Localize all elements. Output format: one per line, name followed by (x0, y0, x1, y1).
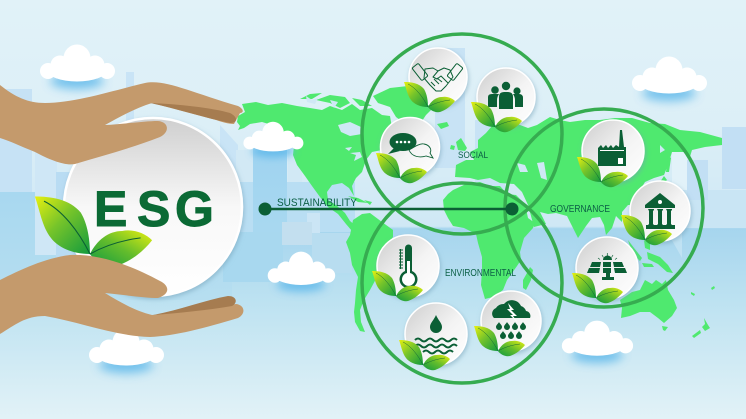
cloud: over alaska (243, 122, 303, 157)
cloud: bottom right (562, 321, 633, 363)
pacific islets (691, 286, 715, 296)
japan and sakhalin (652, 155, 671, 188)
label: sustainability: SUSTAINABILITY (277, 197, 358, 209)
new zealand (692, 318, 710, 338)
cloud: centre (268, 252, 335, 292)
connector line (258, 202, 518, 216)
greenland (373, 86, 433, 131)
cloud: top left (40, 44, 115, 89)
ESG title: ESG (94, 181, 214, 237)
large ESG disc (64, 118, 242, 296)
map: australia (620, 280, 677, 323)
circle: governance (505, 109, 703, 307)
map: africa (443, 182, 535, 299)
cloud: bottom left (89, 328, 164, 373)
icon: handshake (404, 48, 467, 112)
south america (346, 213, 393, 332)
icon: people (471, 68, 535, 132)
circle: environmental (362, 183, 562, 383)
icon: water drop and waves (399, 303, 467, 370)
map: madagascar (523, 267, 533, 290)
arctic islands (300, 93, 372, 108)
icon: solar panel (572, 237, 638, 303)
icon: factory (577, 120, 644, 187)
world map (237, 86, 722, 338)
cuba and caribbean (348, 196, 372, 205)
north america (237, 102, 400, 231)
city skyline (0, 48, 746, 300)
cloud: top right (632, 56, 707, 101)
eurasia (455, 117, 722, 238)
bottom hand (0, 255, 243, 337)
label: social: SOCIAL (458, 150, 488, 161)
indonesia (628, 240, 673, 273)
lakes and inland water (306, 96, 665, 180)
iceland and uk (437, 122, 467, 151)
icon: speech bubbles (376, 118, 440, 183)
icon: bank (621, 181, 690, 245)
icon: storm cloud (474, 291, 541, 356)
top hand (0, 82, 243, 164)
large leaves (35, 196, 152, 266)
tasmania (662, 326, 668, 331)
label: environmental: ENVIRONMENTAL (445, 268, 516, 279)
circle: social (362, 34, 562, 234)
icon: thermometer (372, 235, 439, 301)
label: governance: GOVERNANCE (550, 204, 610, 215)
